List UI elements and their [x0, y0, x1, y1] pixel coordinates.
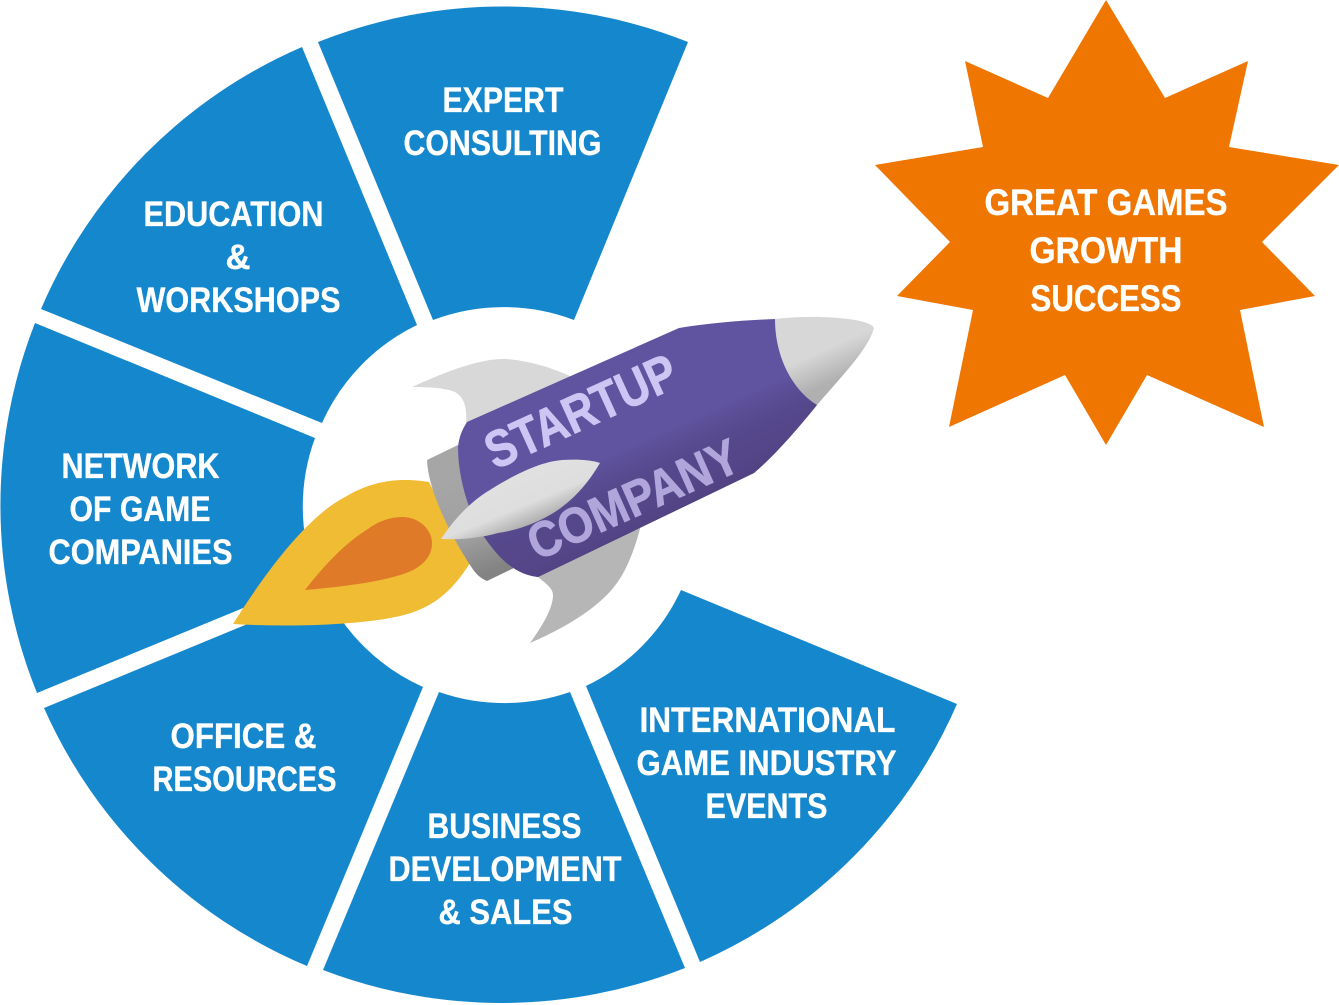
- rocket nose cone: [775, 317, 874, 405]
- icon: exhaust nozzle: [427, 444, 520, 581]
- segment: network of game companies: OF GAME: [70, 490, 210, 529]
- segment: network of game companies: [0, 323, 316, 693]
- rocket illustration: [233, 317, 874, 643]
- segment: education and workshops: EDUCATION: [144, 195, 324, 234]
- label: company: COMPANY: [519, 428, 748, 571]
- segment: business development and sales: BUSINESS: [428, 807, 582, 846]
- segment: business development and sales: DEVELOPMENT: [388, 850, 622, 889]
- segment: business development and sales: [323, 692, 685, 1003]
- icon: upper fin: [412, 359, 580, 425]
- segment: expert consulting: CONSULTING: [404, 124, 602, 163]
- segment: education and workshops: [41, 47, 417, 423]
- segment: education and workshops: WORKSHOPS: [136, 281, 340, 320]
- label: startup: STARTUP: [476, 343, 687, 481]
- segment: office and resources: RESOURCES: [152, 760, 336, 799]
- segment: office and resources: [44, 592, 423, 966]
- rocket body: [458, 319, 817, 577]
- segment: international game industry events: GAME INDUSTRY: [636, 744, 896, 783]
- segment: international game industry events: INTERNATIONAL: [640, 701, 896, 740]
- segment: office and resources: OFFICE &: [170, 717, 316, 756]
- segment: network of game companies: COMPANIES: [48, 533, 232, 572]
- starburst callout: GROWTH: [1030, 230, 1182, 271]
- segment: expert consulting: EXPERT: [442, 81, 564, 120]
- starburst callout: [875, 0, 1339, 445]
- segment: expert consulting: [318, 6, 688, 320]
- icon: lower fin: [530, 525, 641, 643]
- starburst callout: GREAT GAMES: [984, 182, 1228, 223]
- starburst callout: SUCCESS: [1030, 278, 1182, 319]
- segment: international game industry events: EVENTS: [706, 787, 828, 826]
- icon: middle fin: [441, 460, 600, 539]
- service wheel: [0, 6, 957, 1003]
- segment: international game industry events: [586, 590, 957, 962]
- segment: business development and sales: & SALES: [438, 893, 572, 932]
- segment: network of game companies: NETWORK: [62, 447, 220, 486]
- icon: flame: [233, 480, 470, 626]
- segment: education and workshops: &: [226, 238, 250, 277]
